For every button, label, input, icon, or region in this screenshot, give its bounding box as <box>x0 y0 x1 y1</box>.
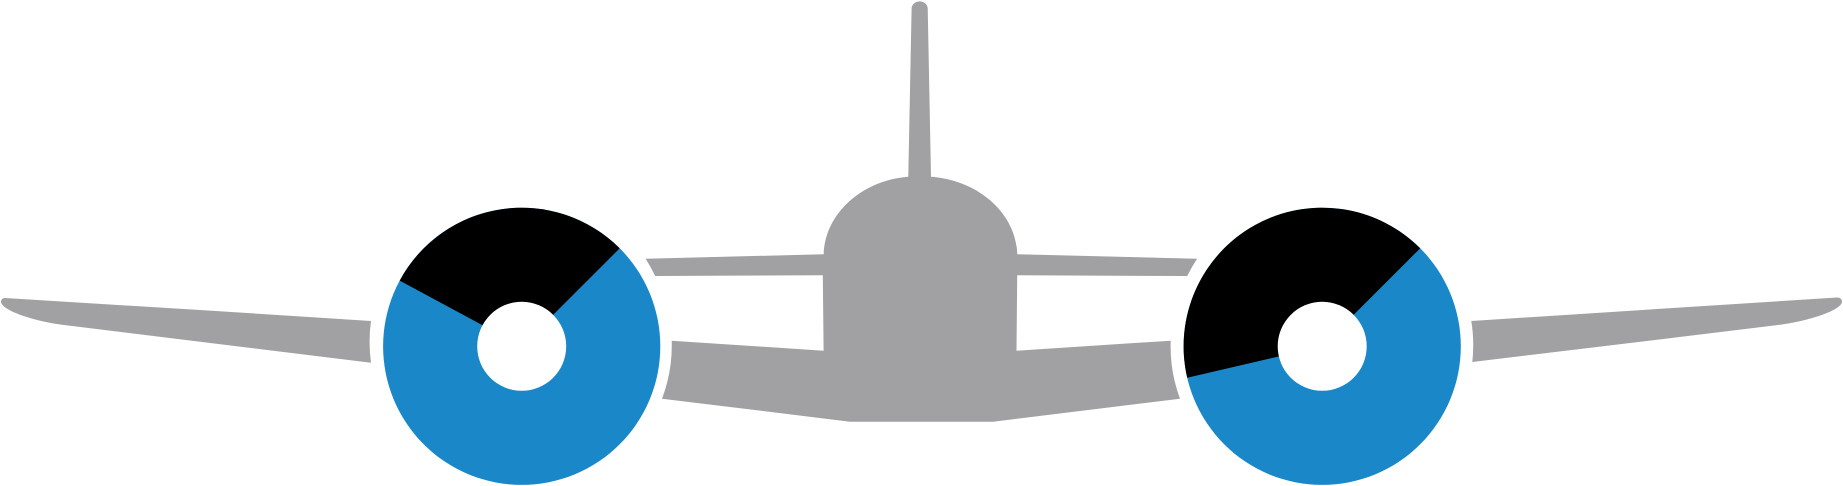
right gauge hole <box>1278 302 1367 391</box>
left gauge hole <box>477 302 566 391</box>
right engine donut gauge <box>1184 208 1461 485</box>
right outer wing <box>1471 298 1842 362</box>
fuselage with tail fin and inner wings <box>646 1 1197 422</box>
left gauge blue segment <box>383 208 660 485</box>
left engine donut gauge <box>383 208 660 485</box>
right gauge blue segment <box>1184 208 1461 485</box>
left outer wing <box>1 298 371 363</box>
right gauge black segment <box>1184 208 1420 378</box>
left gauge black segment <box>400 208 620 346</box>
